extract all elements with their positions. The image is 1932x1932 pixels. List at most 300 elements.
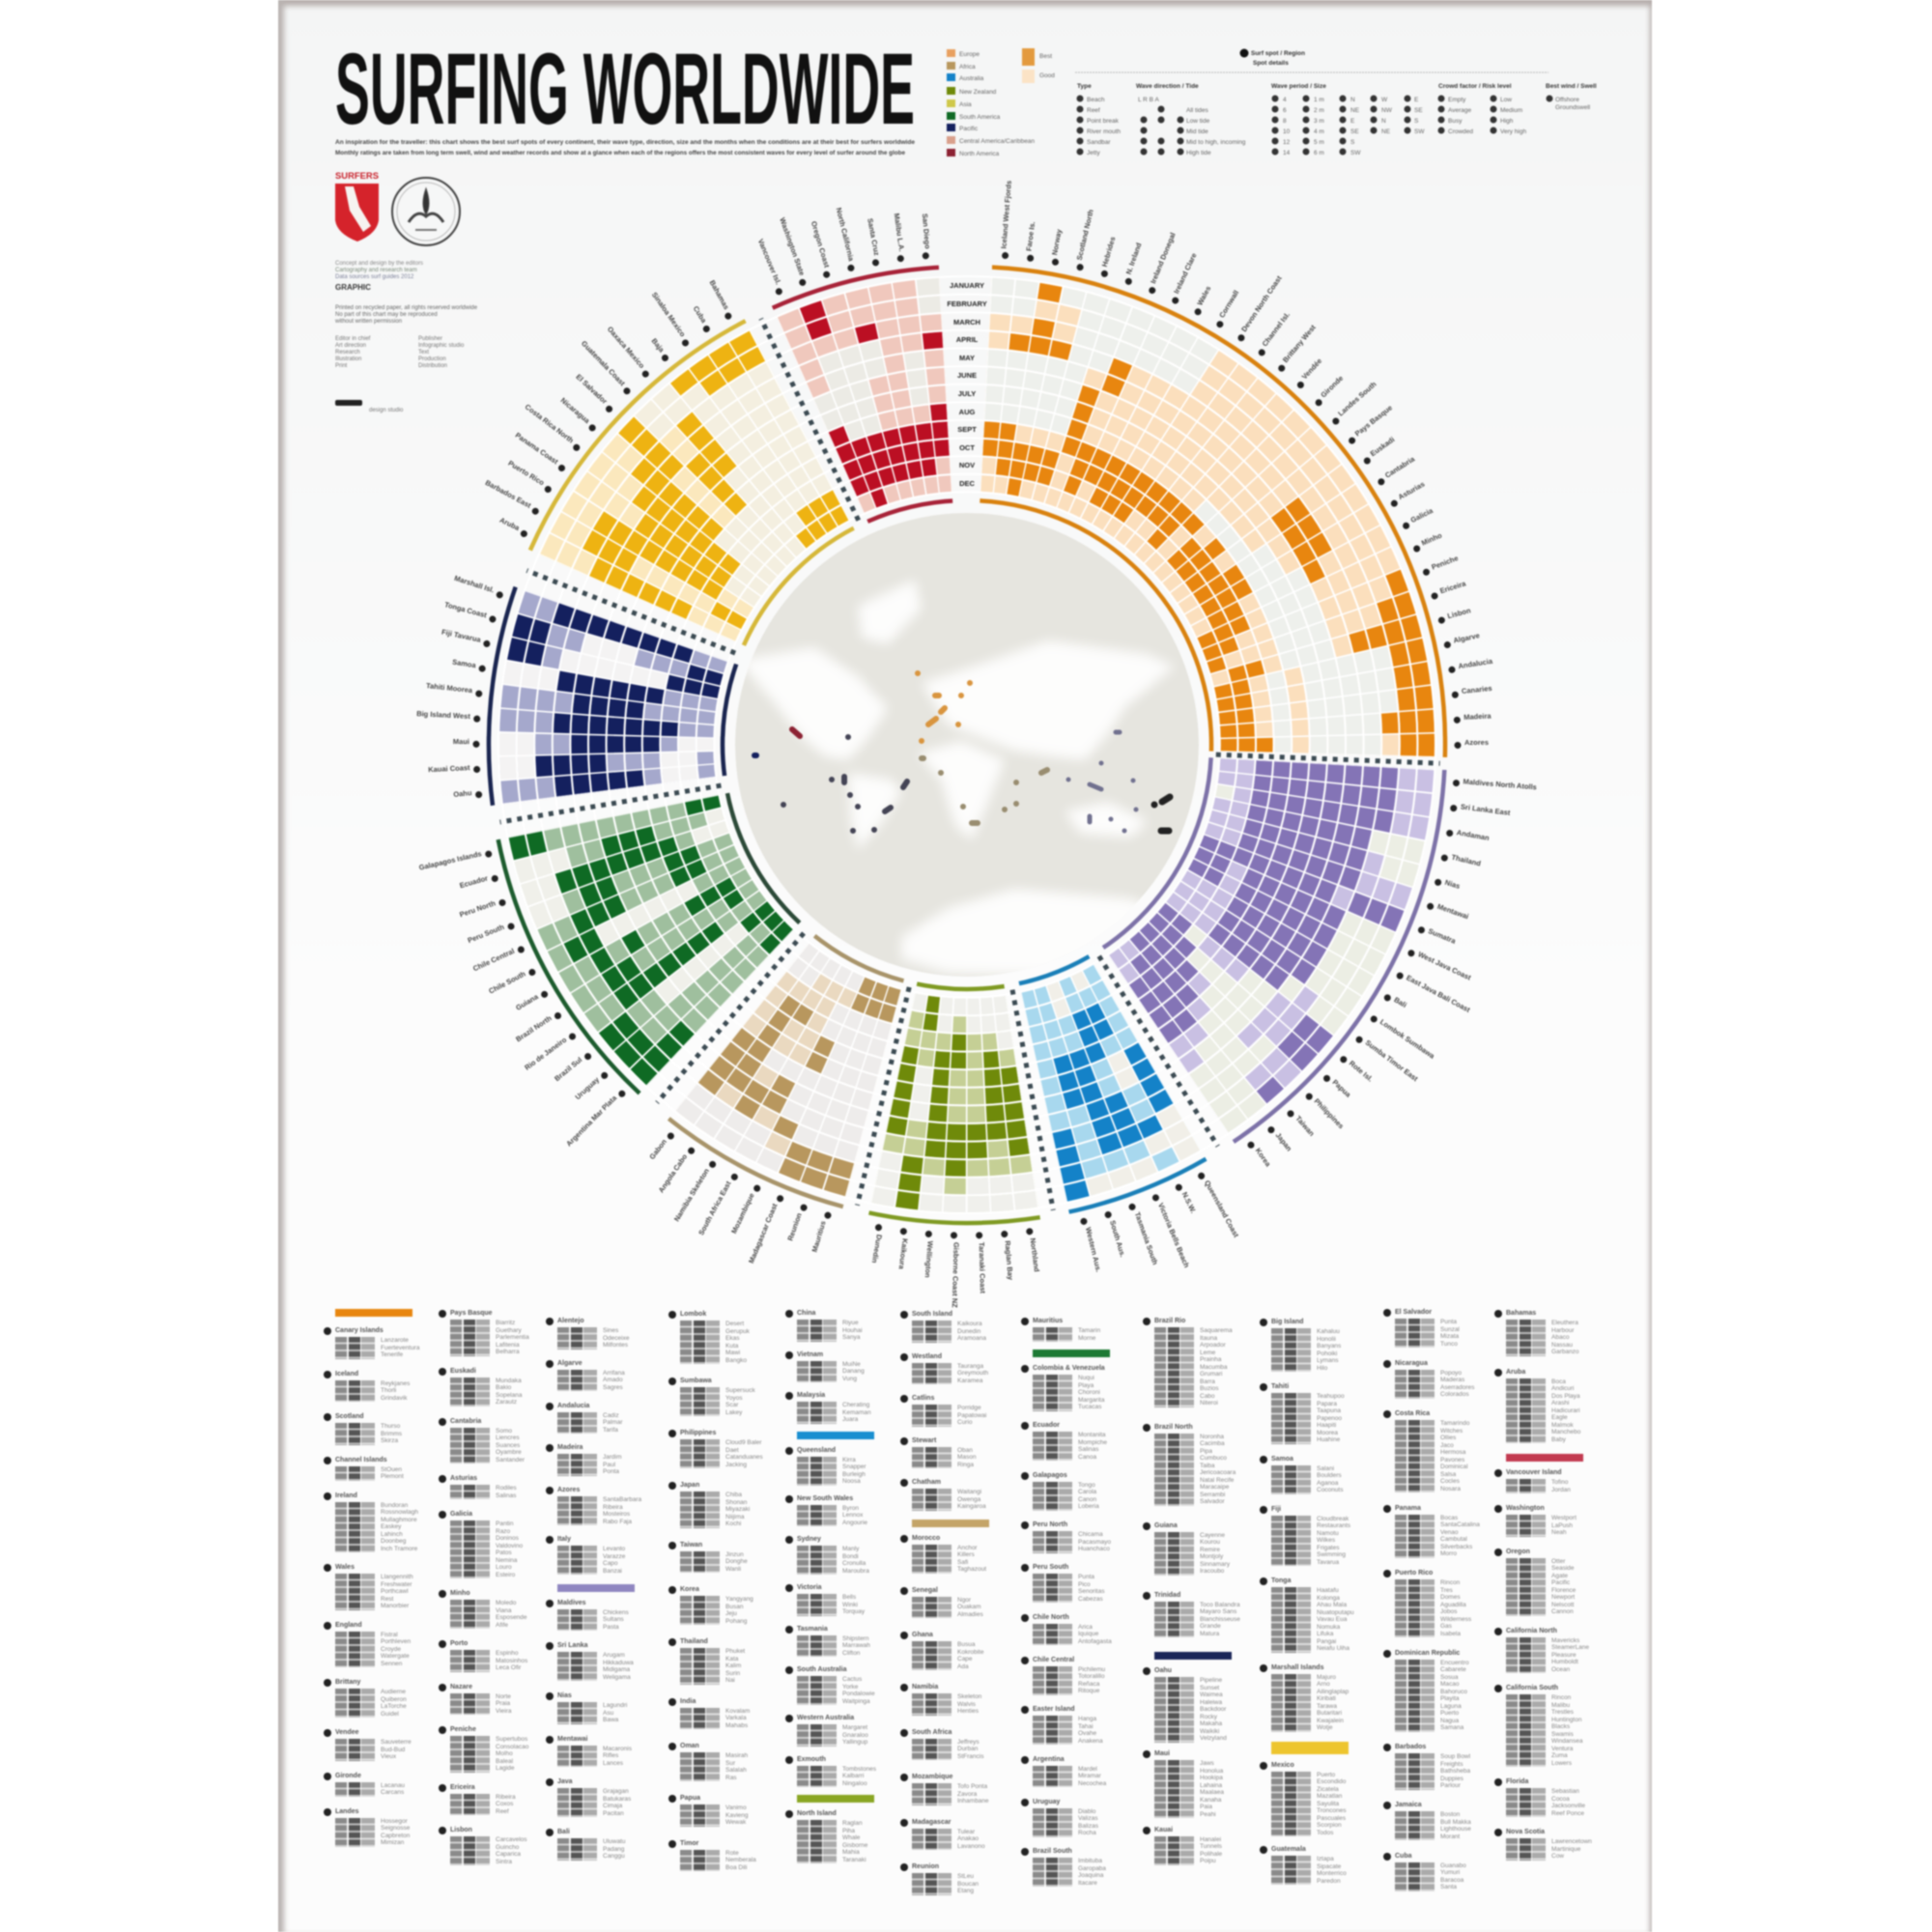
Asia labels: Papua	[1331, 1078, 1353, 1099]
South America labels: Brazil Sul	[553, 1055, 583, 1083]
spot list column 1: Channel Islands	[335, 1457, 387, 1463]
Pacific labels: Samoa	[452, 658, 477, 669]
spot list column 9: Haatafu Kolonga Ahau Mala Niuatoputapu Vavau Eua Nomuka Lifuka Pangai Neiafu Uiha	[1317, 1587, 1354, 1652]
spot list column 1: Iceland	[335, 1370, 358, 1378]
credits: Data sources surf guides 2012	[335, 274, 414, 280]
spot list column 6: Anchor Killers Safi Taghazout	[957, 1544, 986, 1573]
Asia labels	[1253, 767, 1537, 1182]
South America labels: Rio de Janeiro	[523, 1035, 569, 1072]
Africa rating grid	[667, 933, 905, 1220]
legend: regions: Asia	[959, 101, 972, 108]
key: spot table: High	[1500, 118, 1514, 125]
New Zealand labels	[866, 1209, 1046, 1321]
spot list column 11: Eleuthera Harbour Abaco Nassau Garbanzo	[1551, 1320, 1579, 1355]
spot list column 4: Desert Gerupuk Ekas Kuta Mawi Bangko	[725, 1321, 750, 1364]
North America labels: Malibu L.A.	[893, 213, 906, 252]
credits: Production	[418, 356, 446, 362]
spot list column 2: Pays Basque	[450, 1310, 493, 1317]
spot list column 5: Exmouth	[797, 1756, 826, 1762]
South America labels: Peru North	[459, 898, 497, 919]
legend: regions: Africa	[959, 64, 976, 71]
Central America labels: Panama Coast	[514, 431, 560, 467]
spot list column 10: Nicaragua	[1395, 1360, 1428, 1366]
South America labels: Chile South	[487, 969, 527, 996]
spot list column 3: Nias	[557, 1692, 572, 1699]
spot list column 2: Nazare	[450, 1683, 472, 1690]
spot list column 4: Rote Nemberala Boa Dili	[725, 1849, 756, 1870]
logo: red shield: SURFERS	[335, 171, 379, 181]
spot list column 2: Galicia	[450, 1511, 472, 1518]
spot list column 2: Moledo Viana Esposende Afife	[496, 1600, 527, 1629]
key: spot table: 12	[1283, 139, 1291, 146]
Asia labels: Bali	[1392, 995, 1408, 1009]
South America labels: Galapagos Islands	[418, 849, 482, 872]
spot list column 4: Yangyang Busan Jeju Pohang	[725, 1596, 753, 1625]
spot list column 11: Florida	[1506, 1778, 1528, 1785]
spot list column 1: Llangennith Freshwater Porthcawl Rest Manorbier	[381, 1574, 413, 1609]
spot list column 5: Victoria	[797, 1584, 822, 1591]
key: spot table: Groundswell	[1555, 104, 1591, 111]
spot list column 6: Busua Kokrobite Cape Ada	[957, 1641, 983, 1669]
spot list column 5: Cactus Yorke Pondalowie Waitpinga	[842, 1676, 875, 1704]
spot list column 7: Arica Iquique Antofagasta	[1078, 1623, 1112, 1644]
spot list column 2: Porto	[450, 1640, 468, 1647]
spot list column 6: Madagascar	[912, 1818, 951, 1826]
South America labels: Uruguay	[574, 1075, 602, 1101]
spot list column 4: Masirah Sur Salalah Ras	[725, 1752, 748, 1781]
spot list column 7: Punta Pico Senoritas Cabezas	[1078, 1574, 1104, 1602]
spot list column 11: Boca Andicuri Dos Playa Arashi Hadicurari Eagle Malmok Manchebo Baby	[1551, 1378, 1580, 1443]
key: spot table: SE	[1414, 107, 1423, 114]
Australia labels	[1072, 1161, 1243, 1310]
spot list column 2: Rodiles Salinas	[496, 1485, 517, 1499]
spot list column 8: Noronha Cacimba Pipa Cumbuco Taiba Jericoacoara Natal Recife Maracaipe Serrambi Salvador	[1200, 1434, 1236, 1505]
credits: Distribution	[418, 363, 447, 369]
spot list column 1: Gironde	[335, 1772, 361, 1779]
key: spot table: Reef	[1087, 107, 1100, 114]
credits: Concept and design by the editors	[335, 261, 423, 267]
Australia labels: Western Aus.	[1084, 1226, 1103, 1273]
credits: Printed on recycled paper, all rights reserved worldwide	[335, 305, 478, 311]
Europe labels: Channel Isl.	[1261, 310, 1292, 348]
key: spot table: Empty	[1448, 97, 1466, 103]
key: spot table: Crowded	[1448, 128, 1473, 135]
spot list column 9: Iztapa Sipacate Monterrico Paredon	[1317, 1856, 1347, 1884]
spot list column 3: Chickens Sultans Pasta	[603, 1609, 629, 1631]
spot list column 6: Skeleton Walvis Henties	[957, 1693, 981, 1715]
key: spot table: Mid to high, incoming	[1186, 139, 1246, 146]
month labels: MAY	[959, 354, 975, 362]
spot list column 1: Wales	[335, 1564, 355, 1571]
spot list column 8	[1142, 1316, 1240, 1866]
spot list column 10: Puerto Rico	[1395, 1570, 1433, 1577]
spot list column 6: Mozambique	[912, 1774, 952, 1780]
month labels: SEPT	[957, 425, 977, 434]
spot list column 6: Catlins	[912, 1395, 934, 1402]
Asia rating grid	[1101, 756, 1461, 1150]
region bar: Africa	[912, 1519, 989, 1526]
intro text: An inspiration for the traveller: this chart shows the best surf spots of every continent, their wave type, direction, size and the months when the conditions are at their best for surfers worldwide	[335, 139, 915, 146]
spot list column 8: Saquarema Itauna Arpoador Leme Prainha Macumba Grumari Barra Buzios Cabo Niteroi	[1200, 1327, 1233, 1406]
legend: regions: Central America/Caribbean	[959, 138, 1035, 145]
spot list column 9: Samoa	[1271, 1455, 1293, 1463]
key: spot table: Wave direction / Tide	[1136, 83, 1199, 90]
spot list column 1: Brittany	[335, 1679, 360, 1686]
Asia labels: Thailand	[1451, 853, 1482, 868]
spot list column 5: MuiNe Danang Vung	[842, 1360, 865, 1381]
legend: regions	[947, 49, 1035, 157]
spot list column 3: SantaBarbara Ribeira Mosteiros Rabo Faja	[603, 1496, 641, 1525]
spot list column 11: Oregon	[1506, 1548, 1530, 1555]
spot list column 1	[323, 1308, 420, 1848]
spot list column 1: StOuen Plemont	[381, 1466, 404, 1480]
spot list column 6: Tulear Anakao Lavanono	[957, 1828, 985, 1849]
Central America labels: Puerto Rico	[506, 459, 546, 488]
spot list column 4: Chiba Shonan Miyazaki Niijima Kochi	[725, 1492, 750, 1527]
key: spot table: Wave period / Size	[1271, 83, 1326, 90]
publisher mark	[335, 400, 404, 413]
continents	[738, 580, 1175, 976]
key: spot table: Best wind / Swell	[1546, 83, 1597, 90]
month labels: FEBRUARY	[947, 299, 987, 308]
spot list column 5: Kirra Snapper Burleigh Noosa	[842, 1457, 867, 1485]
spot list column 4: Sumbawa	[680, 1378, 712, 1384]
spot list column 11: Bahamas	[1506, 1310, 1536, 1317]
key: spot table: Surf spot / Region	[1251, 50, 1305, 57]
spot list column 4: Jinzun Donghe Wanli	[725, 1551, 748, 1573]
spot list column 1: Audierne Quiberon LaTorche Guidel	[381, 1689, 407, 1718]
spot list column 7: Chile North	[1033, 1613, 1069, 1621]
New Zealand rating grid	[867, 981, 1041, 1240]
South America labels: Guiana	[514, 992, 540, 1012]
spot list column 1: Sauveterre Bud-Bud Vieux	[381, 1739, 412, 1760]
spot list column 8: Maui	[1154, 1750, 1170, 1757]
spot list column 6: StLeu Boucan Etang	[957, 1873, 979, 1894]
spot list column 3: Madeira	[557, 1444, 582, 1451]
key: spot table: High tide	[1186, 150, 1211, 156]
Australia rating grid	[1018, 954, 1208, 1226]
spot list column 10: Jamaica	[1395, 1802, 1422, 1808]
spot list column 4: Lombok	[680, 1311, 706, 1318]
Asia labels: Maldives North Atolls	[1463, 777, 1537, 791]
Central America labels: Nicaragua	[559, 396, 592, 426]
sector: Australia	[1018, 954, 1239, 1273]
month labels: JANUARY	[950, 281, 984, 290]
spot list column 6	[899, 1310, 990, 1896]
spot list column 4: Timor	[680, 1839, 698, 1847]
credits: Research	[335, 350, 360, 355]
spot list column 5: Western Australia	[797, 1715, 854, 1721]
key: spot table: N	[1350, 97, 1355, 103]
Africa labels	[628, 1135, 838, 1280]
key: spot table	[1075, 48, 1597, 156]
Africa labels: Mozambique	[729, 1192, 756, 1236]
Asia labels: Rote Isl.	[1348, 1059, 1375, 1084]
Europe labels: Ireland Clare	[1172, 252, 1199, 295]
spot list column 2: Lisbon	[450, 1827, 472, 1833]
spot list column 8: Kauai	[1154, 1826, 1173, 1833]
Pacific labels: Fiji Tavarua	[440, 627, 482, 644]
key: spot table: 4	[1283, 97, 1287, 103]
spot list column 6: Morocco	[912, 1534, 940, 1542]
spot list column 9: Tonga	[1271, 1577, 1291, 1584]
spot list column 9: Majuro Arno Ailinglaplap Kiribati Tarawa Butaritari Kwajalein Wotje	[1317, 1673, 1349, 1731]
credits: Print	[335, 363, 348, 369]
Europe labels: Azores	[1464, 738, 1489, 747]
spot list column 4: Taiwan	[680, 1542, 702, 1548]
Central America labels: Baja	[650, 336, 667, 355]
Central America labels: Guatemala Coast	[580, 339, 627, 388]
spot list column 5: Vietnam	[797, 1350, 823, 1358]
North America rating grid	[771, 251, 954, 525]
region bar: Asia	[557, 1584, 635, 1592]
spot list column 6: Jeffreys Durban StFrancis	[957, 1739, 983, 1760]
Europe labels: Cantabria	[1383, 454, 1417, 480]
key: spot table: L R B A	[1138, 97, 1159, 103]
spot list column 2: Somo Liencres Suances Oyambre Santander	[496, 1428, 525, 1463]
surf spot markers	[754, 673, 1170, 831]
spot list column 8: Jaws Honolua Hookipa Lahaina Maalaea Kanaha Paia Peahi	[1200, 1760, 1224, 1818]
key: spot table: 4 m	[1314, 128, 1324, 135]
key: spot table: Medium	[1500, 107, 1522, 114]
Africa labels: Mauritius	[810, 1220, 828, 1253]
Australia labels: Victoria Bells Beach	[1156, 1202, 1191, 1269]
spot list column 6: Chatham	[912, 1479, 941, 1486]
key: spot table: 3 m	[1314, 118, 1324, 125]
sector: North America	[757, 207, 954, 525]
region bar: Europe	[335, 1309, 412, 1317]
spot list column 3: Alentejo	[557, 1318, 584, 1324]
spot list column 5: Tasmania	[797, 1625, 828, 1633]
spot list column 2: Supertubos Consolacao Molho Baleal Lagide	[496, 1736, 528, 1772]
key: spot table: Spot details	[1253, 60, 1289, 67]
spot list column 7: Chile Central	[1033, 1656, 1074, 1663]
Africa labels: South Africa East	[696, 1179, 733, 1236]
spot list column 7: Imbituba Garopaba Joaquina Itacare	[1078, 1858, 1106, 1886]
spot list column 11: Lawrencetown Martinique Cow	[1551, 1838, 1592, 1860]
month labels: JUNE	[957, 371, 977, 380]
spot list column 2: Carcavelos Guincho Caparica Sintra	[496, 1836, 527, 1864]
spot list column 10: Tamarindo Witches Ollies Jaco Hermosa Pavones Dominical Salsa Cocles Nosara	[1440, 1420, 1469, 1492]
spot list column 1: Lacanau Carcans	[381, 1781, 405, 1796]
spot list column 1: Bundoran Rossnowlagh Mullaghmore Easkey Lahinch Doonbeg Inch Tramore	[381, 1501, 418, 1551]
spot list column 7: Ecuador	[1033, 1422, 1060, 1429]
spot list column 6: Westland	[912, 1352, 942, 1360]
spot list column 5: Malaysia	[797, 1392, 825, 1399]
key: spot table: NW	[1381, 107, 1393, 114]
spot list column 6: Reunion	[912, 1863, 939, 1870]
spot list column 7: Tongo Carola Canon Loberia	[1078, 1482, 1099, 1510]
spot list column 6: Porridge Papatowai Curio	[957, 1405, 986, 1426]
New Zealand labels: Dunedin	[870, 1234, 884, 1264]
spot list column 8: Trinidad	[1154, 1592, 1180, 1598]
Europe labels: Madeira	[1463, 711, 1492, 722]
Europe labels: Scotland North	[1075, 208, 1095, 261]
Europe labels: Algarve	[1453, 631, 1480, 645]
spot list column 3: Cadiz Palmar Tarifa	[603, 1412, 623, 1434]
spot list column 8: Guiana	[1154, 1522, 1178, 1528]
logo: red shield	[335, 171, 379, 242]
key: spot table: Jetty	[1087, 150, 1100, 156]
spot list column 5: Shipstern Marrawah Clifton	[842, 1634, 870, 1656]
Asia labels: Nias	[1444, 878, 1461, 891]
spot list column 6: South Island	[912, 1311, 952, 1318]
New Zealand labels: Northland	[1028, 1237, 1041, 1273]
Europe labels: Peniche	[1431, 554, 1460, 572]
Central America labels: Sinaloa Mexico	[650, 291, 688, 339]
spot list column 10: Cuba	[1395, 1853, 1412, 1859]
Africa labels: Gabon	[647, 1137, 668, 1161]
legend: rating swatches: Best	[1039, 53, 1052, 60]
spot list column 5: Margaret Gnaraloo Yallingup	[842, 1724, 868, 1746]
spot list column 9: Cloudbreak Restaurants Namotu Wilkes Frigates Swimming Tavarua	[1317, 1515, 1350, 1565]
spot list column 6: Senegal	[912, 1586, 938, 1594]
spot list column 5: China	[797, 1310, 815, 1317]
spot list column 7: Diablo Valizas Balizas Rocha	[1078, 1808, 1098, 1836]
spot list column 11: Aruba	[1506, 1368, 1525, 1376]
key: spot table: 1 m	[1314, 97, 1324, 103]
key: spot table: Offshore	[1555, 97, 1579, 103]
sector: Africa	[649, 933, 905, 1264]
key: spot table: E	[1350, 118, 1355, 125]
key: spot table: 6 m	[1314, 150, 1324, 156]
spot list column 11: Westport LaPush Neah	[1551, 1515, 1577, 1536]
spot list column 3: Macaronis Rifles Lances	[603, 1746, 632, 1767]
spot list column 6: South Africa	[912, 1729, 952, 1735]
spot list column 9: Salani Boulders Aganoa Coconuts	[1317, 1464, 1343, 1493]
Africa labels: Angola Cabo	[657, 1152, 689, 1194]
spot list column 4: Phuket Kata Kalim Surin Nai	[725, 1648, 745, 1684]
dashed sector separators	[500, 319, 1440, 1210]
Asia labels: Sumba Timor East	[1364, 1038, 1420, 1084]
spot list column 10: Dominican Republic	[1395, 1650, 1460, 1656]
spot list column 2: Ribeira Coxos Reef	[496, 1793, 516, 1814]
key: spot table: Busy	[1448, 118, 1463, 125]
key: spot table: N	[1381, 118, 1386, 125]
Europe labels: Ireland Donegal	[1149, 231, 1178, 285]
Europe labels: Minho	[1420, 530, 1443, 548]
spot list column 7: Uruguay	[1033, 1799, 1060, 1804]
spot list column 9: Teahupoo Papara Taapuna Papenoo Haapiti Moorea Huahine	[1317, 1393, 1345, 1443]
spot list column 11: Vancouver Island	[1506, 1469, 1562, 1476]
spot list column 10: Bocas SantaCatalina Venao Cambutal Silverbacks Morro	[1440, 1515, 1480, 1557]
spot list column 2: Cantabria	[450, 1418, 481, 1424]
spot list column 4: Papua	[680, 1795, 700, 1802]
spot list column 4: Philippines	[680, 1430, 716, 1436]
Europe labels: Asturias	[1397, 480, 1426, 501]
spot list column 2	[438, 1309, 529, 1866]
Australia labels: Tasmania South	[1133, 1210, 1160, 1266]
region bar: South America	[1033, 1350, 1110, 1357]
spot list column 2: Espinho Matosinhos Leca Ofir	[496, 1650, 527, 1671]
spot list column 6: Kaikoura Dunedin Aramoana	[957, 1321, 986, 1342]
spot list column 9	[1259, 1318, 1354, 1886]
world map	[735, 513, 1199, 977]
key: spot table: Type	[1077, 83, 1092, 90]
spot list column 8: Brazil Rio	[1154, 1318, 1185, 1324]
credits: without written permission	[334, 319, 402, 325]
spot list column 5: Cherating Kemaman Juara	[842, 1402, 871, 1423]
spot list column 11: California North	[1506, 1627, 1557, 1634]
key: spot table: NE	[1381, 128, 1391, 135]
spot list column 8: Oahu	[1154, 1667, 1172, 1674]
spot list column 11: Mavericks SteamerLane Pleasure Humboldt Ocean	[1551, 1636, 1589, 1673]
Europe labels: Ericeira	[1438, 579, 1467, 595]
month labels: AUG	[959, 408, 975, 416]
sector: Central America and Caribbean	[485, 279, 856, 647]
Central America labels: Bahamas	[708, 278, 731, 311]
spot list column 3: Sines Odeceixe Milfontes	[603, 1327, 629, 1349]
spot list column 4: Cloud9 Baler Daet Catanduanes Jacking	[725, 1439, 763, 1468]
South America labels: Argentina Mar Plata	[564, 1094, 619, 1149]
key: spot table: Crowd factor / Risk level	[1438, 83, 1512, 90]
spot list column 3: Mentawai	[557, 1736, 588, 1743]
North America labels: Oregon Coast	[810, 220, 832, 270]
spot list column 10: El Salvador	[1395, 1309, 1432, 1316]
New Zealand labels: Wellington	[923, 1240, 935, 1278]
spot list column 2: Norte Praia Vieira	[496, 1692, 512, 1714]
spot list column 6: Waitangi Owenga Kaingaroa	[957, 1489, 986, 1510]
spot list column 7: Brazil South	[1033, 1848, 1072, 1855]
key: spot table: 8	[1283, 118, 1287, 125]
Central America labels: Costa Rica North	[524, 402, 576, 445]
credits	[334, 261, 478, 369]
Australia labels: South Aus.	[1108, 1219, 1127, 1259]
credits: Illustration	[335, 356, 361, 362]
credits: GRAPHIC	[335, 283, 371, 292]
spot list column 3: Andalucia	[557, 1403, 589, 1409]
legend: rating swatches: Good	[1039, 72, 1055, 79]
key: spot table: SW	[1414, 128, 1425, 135]
spot list column 1: Canary Islands	[335, 1327, 384, 1334]
Europe labels: Norway	[1050, 228, 1064, 256]
Central America labels: Cuba	[692, 304, 709, 325]
Africa labels: Namibia Skeleton	[672, 1167, 711, 1223]
spot list column 9: Puerto Escondido Zicatela Mazatlan Sayulita Troncones Pascuales Scorpion Todos	[1317, 1772, 1346, 1835]
spot list column 1: Scotland	[335, 1413, 364, 1420]
month labels: APRIL	[956, 335, 979, 344]
Central America labels	[472, 227, 739, 575]
Europe labels: Wales	[1195, 285, 1212, 307]
month labels: MARCH	[953, 318, 980, 327]
spot list column 3: Algarve	[557, 1360, 582, 1367]
Pacific labels	[399, 569, 522, 803]
key: spot table: Beach	[1087, 97, 1105, 103]
spot list column 7: Colombia & Venezuela	[1033, 1365, 1105, 1372]
spot list column 6: Tauranga Greymouth Karamea	[957, 1362, 988, 1383]
spot list column 9: Kahaluu Honolii Banyans Pohoiki Lymans Hilo	[1317, 1328, 1341, 1372]
spot list column 3: Jardim Paul Ponta	[603, 1454, 622, 1475]
South America labels: Brazil North	[514, 1013, 554, 1043]
spot list column 9: Mexico	[1271, 1762, 1294, 1768]
key: spot table: Very high	[1500, 128, 1526, 135]
key: spot table: NE	[1350, 107, 1360, 114]
spot list column 4: India	[680, 1698, 696, 1704]
key: spot table: S	[1414, 118, 1419, 125]
spot list column 8: Hanalei Tunnels Polihale Poipu	[1200, 1835, 1222, 1864]
month labels: DEC	[959, 479, 975, 488]
credits: Cartography and research team	[335, 268, 417, 273]
spot list column 9: Tahiti	[1271, 1383, 1289, 1390]
Asia labels: Andaman	[1456, 828, 1491, 842]
South America labels: Chile Central	[471, 947, 516, 973]
spot list column 2: Asturias	[450, 1475, 477, 1482]
New Zealand labels: Raglan Bay	[1004, 1240, 1015, 1281]
spot list column 9: Fiji	[1271, 1505, 1281, 1513]
key: spot table: 10	[1283, 128, 1291, 135]
spot list column 3: Maldives	[557, 1600, 586, 1606]
Africa labels: Reunion	[785, 1211, 804, 1242]
